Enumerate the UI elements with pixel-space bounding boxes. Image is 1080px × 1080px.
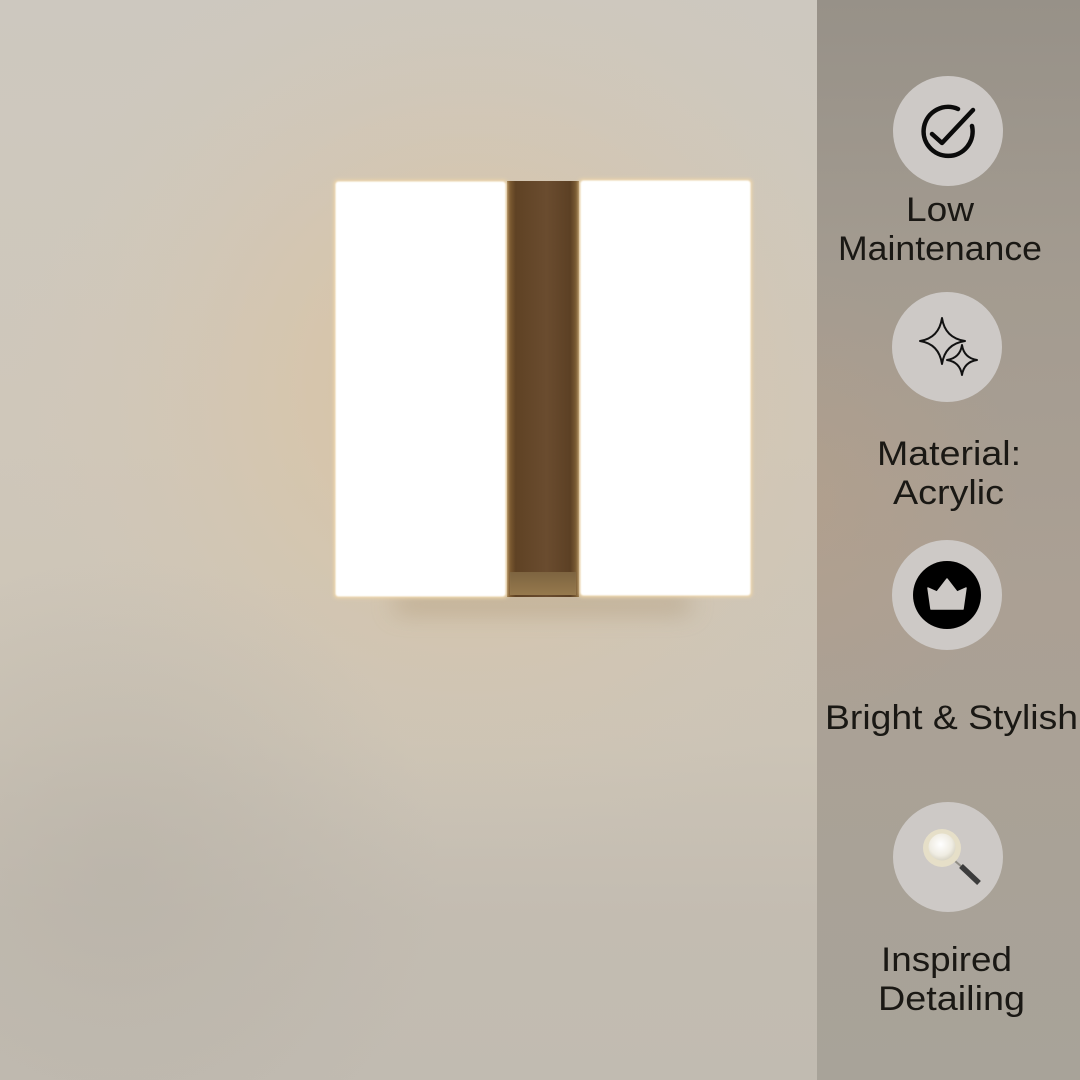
lamp wood centre bar bbox=[507, 181, 579, 597]
sidebar panel bbox=[817, 0, 1080, 1080]
lamp left glowing panel bbox=[334, 180, 507, 598]
feature: low maintenance bbox=[838, 76, 1042, 268]
lamp right glowing panel bbox=[579, 179, 752, 597]
label: low maintenance: Low bbox=[906, 191, 974, 229]
lamp shadow bbox=[395, 596, 690, 612]
feature: inspired detailing bbox=[878, 802, 1025, 1018]
icon: sparkles bbox=[892, 292, 1002, 402]
label: bright and stylish: Bright & Stylish bbox=[825, 699, 1078, 737]
wall lamp bbox=[334, 179, 752, 612]
label: inspired detailing: Inspired bbox=[881, 941, 1012, 979]
feature: bright and stylish bbox=[825, 540, 1078, 737]
label: low maintenance: Maintenance bbox=[838, 230, 1042, 268]
feature: material acrylic bbox=[877, 292, 1030, 512]
label: material acrylic: Acrylic bbox=[893, 474, 1004, 512]
icon: magnifying glass bbox=[893, 802, 1003, 912]
icon: check badge bbox=[893, 76, 1003, 186]
label: material acrylic: Material: bbox=[877, 435, 1021, 473]
label: inspired detailing: Detailing bbox=[878, 980, 1025, 1018]
icon: crown bbox=[892, 540, 1002, 650]
